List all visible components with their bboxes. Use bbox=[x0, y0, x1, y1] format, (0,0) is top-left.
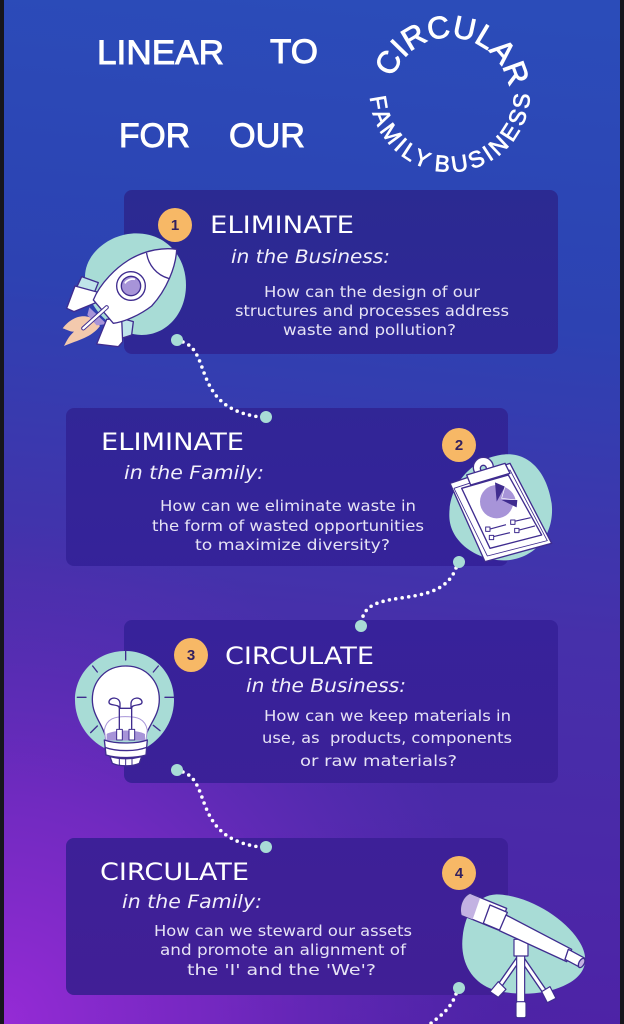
subheading: in the Family: bbox=[124, 462, 264, 484]
body text: the form of wasted opportunities bbox=[152, 517, 424, 535]
circular title: FAMILY BUSINESS bbox=[370, 94, 530, 172]
body text: How can we eliminate waste in bbox=[160, 497, 416, 515]
badge 4: 4 bbox=[455, 865, 464, 882]
badge 2 bbox=[442, 428, 476, 462]
panel: circulate in the business bbox=[124, 620, 558, 783]
panel: eliminate in the business bbox=[124, 190, 558, 354]
circular title: CIRCULAR bbox=[377, 16, 528, 87]
icon: light bulb bbox=[75, 650, 174, 766]
heading: CIRCULATE bbox=[100, 858, 249, 886]
body text: How can the design of our bbox=[264, 283, 481, 301]
badge 3 bbox=[174, 638, 208, 672]
connector 1 bbox=[171, 334, 272, 423]
subheading: in the Business: bbox=[246, 675, 406, 697]
panel: circulate in the family bbox=[66, 838, 508, 995]
icon: rocket bbox=[63, 233, 186, 347]
body text: structures and processes address bbox=[235, 302, 509, 320]
body text: or raw materials? bbox=[300, 752, 457, 770]
icon: telescope bbox=[461, 893, 586, 1018]
subheading: in the Business: bbox=[231, 246, 390, 268]
circular title bbox=[370, 16, 530, 172]
connector 2 bbox=[355, 556, 465, 632]
body text bbox=[262, 707, 512, 770]
title bbox=[97, 33, 318, 155]
body text: the 'I' and the 'We'? bbox=[187, 961, 376, 979]
badge 1 bbox=[158, 208, 192, 242]
title: OUR bbox=[229, 117, 305, 155]
body text: to maximize diversity? bbox=[195, 536, 390, 554]
title: LINEAR bbox=[97, 34, 224, 72]
icon: clipboard bbox=[449, 454, 552, 562]
connector 3 bbox=[171, 764, 272, 853]
connector 4 bbox=[430, 982, 465, 1024]
badge 1: 1 bbox=[171, 217, 179, 234]
title: TO bbox=[270, 33, 318, 71]
subheading: in the Family: bbox=[122, 891, 262, 913]
title: FOR bbox=[119, 117, 190, 155]
panel: eliminate in the family bbox=[66, 408, 508, 566]
body text: and promote an alignment of bbox=[160, 941, 407, 959]
body text bbox=[154, 922, 412, 979]
body text: waste and pollution? bbox=[283, 321, 456, 339]
badge 2: 2 bbox=[455, 437, 463, 454]
badge 4 bbox=[442, 856, 476, 890]
badge 3: 3 bbox=[187, 647, 195, 664]
body text bbox=[152, 497, 424, 554]
body text: How can we keep materials in bbox=[264, 707, 511, 725]
body text bbox=[235, 283, 509, 339]
heading: ELIMINATE bbox=[210, 211, 354, 239]
body text: use, as products, components bbox=[262, 729, 512, 747]
heading: ELIMINATE bbox=[101, 428, 244, 456]
body text: How can we steward our assets bbox=[154, 922, 412, 940]
heading: CIRCULATE bbox=[225, 642, 374, 670]
